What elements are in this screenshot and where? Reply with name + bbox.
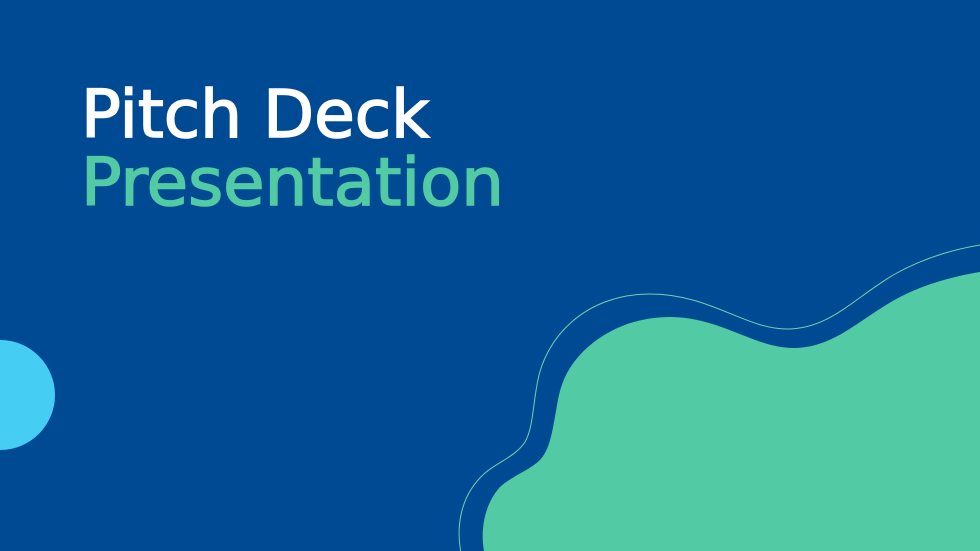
title: Pitch Deck Presentation: [81, 76, 504, 221]
decorative circle: light blue: [0, 340, 55, 450]
thin wave outline: [459, 245, 980, 551]
title line: Pitch Deck: Pitch Deck: [81, 76, 430, 153]
green wave shape: [483, 272, 980, 551]
title line: Presentation: Presentation: [81, 144, 504, 221]
